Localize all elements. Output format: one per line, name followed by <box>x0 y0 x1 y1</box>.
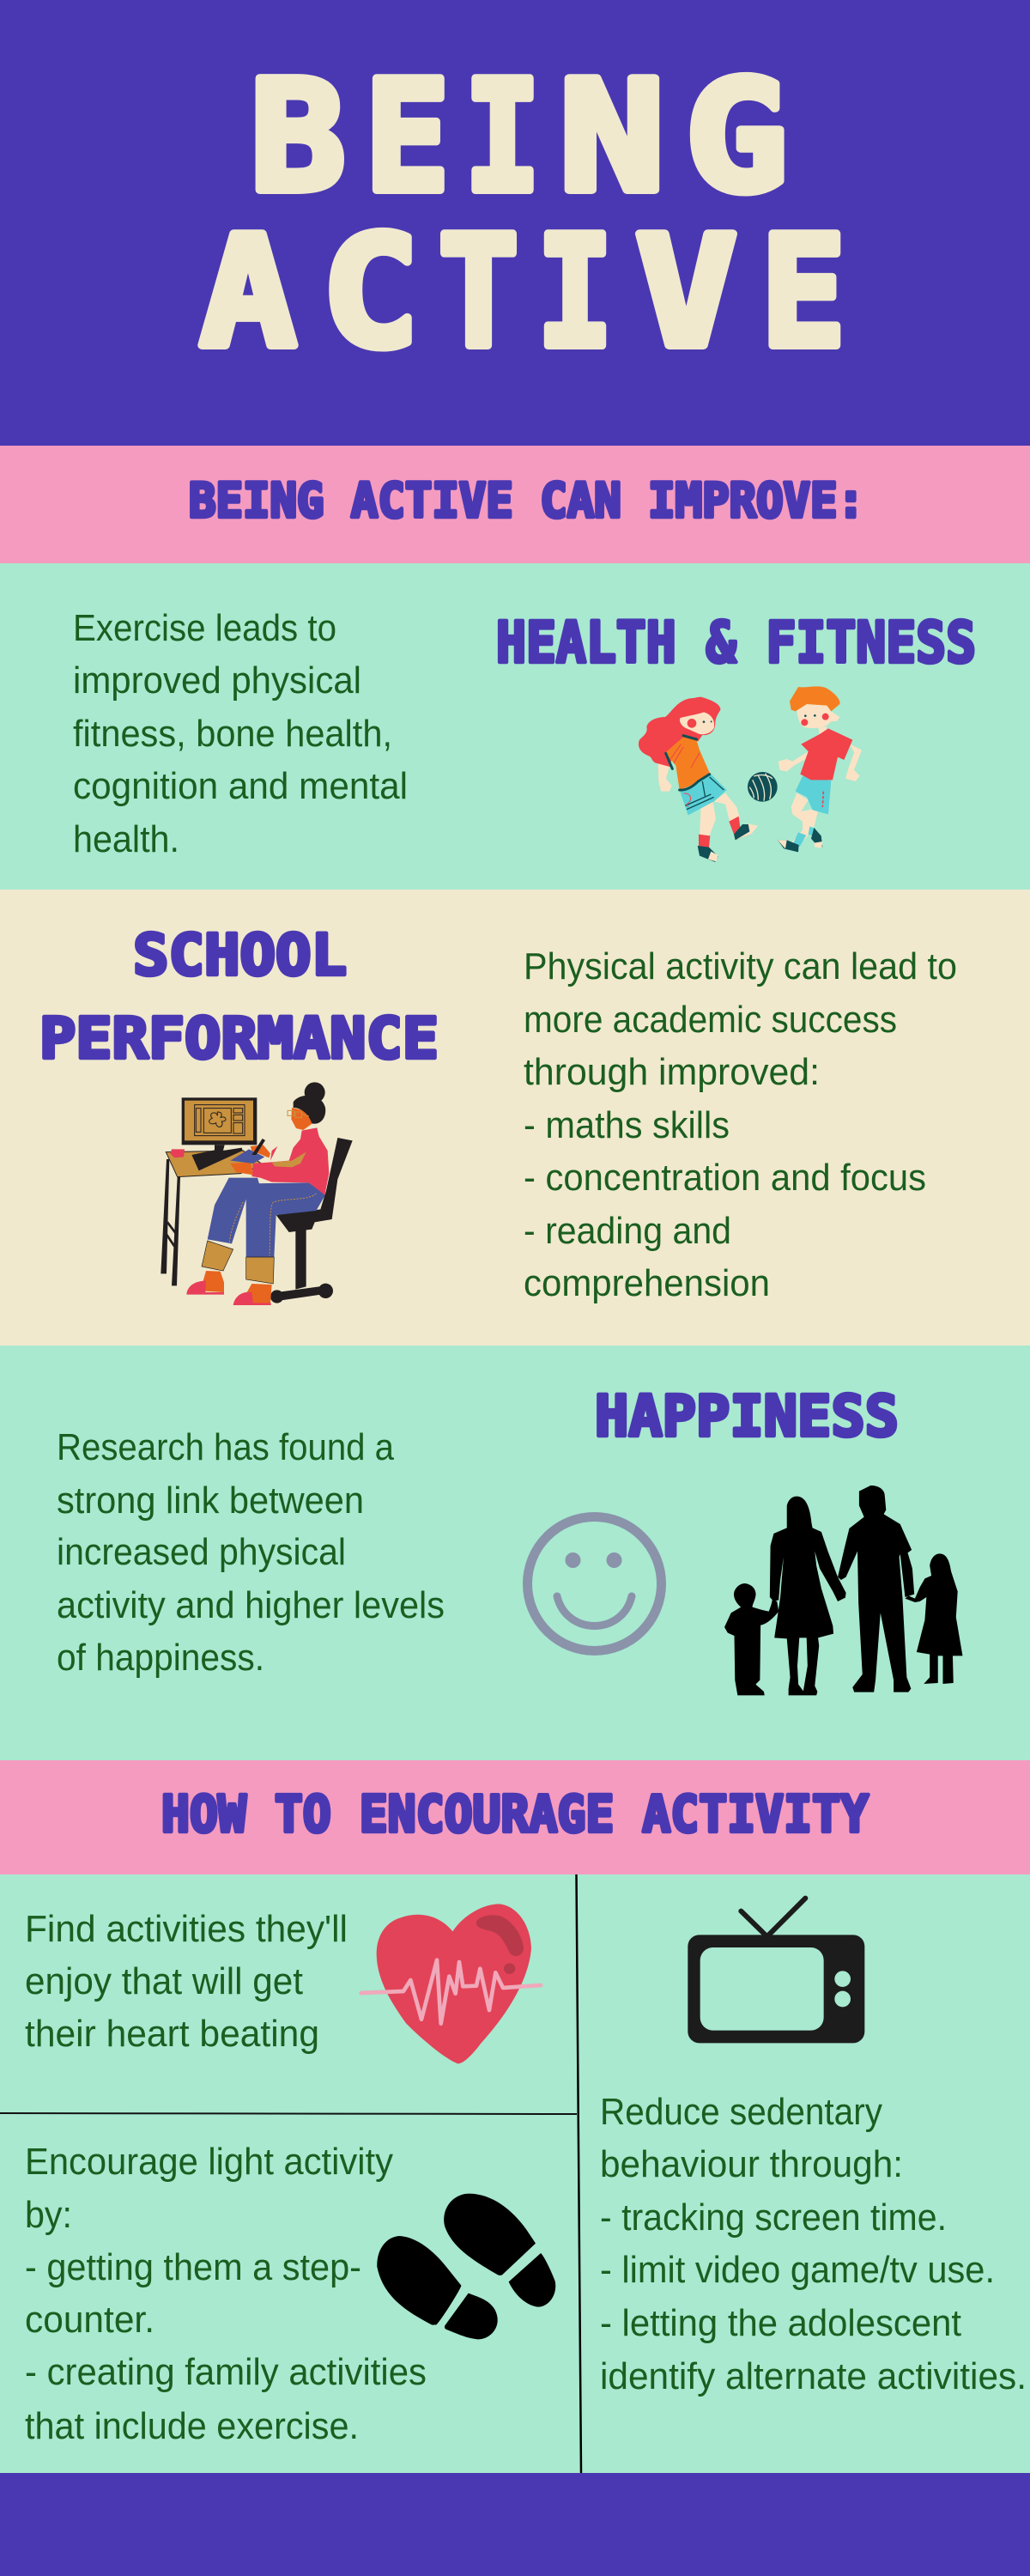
text block: school performance: Physical activity can lead to <box>524 945 957 987</box>
text block: happiness: strong link between <box>57 1479 364 1522</box>
panel: title banner <box>0 0 1030 446</box>
text block: health and fitness <box>73 607 408 860</box>
title: E <box>365 48 450 226</box>
text block: happiness: increased physical <box>57 1531 346 1573</box>
text block: school performance: - maths skills <box>524 1104 730 1146</box>
text block: light activity <box>25 2141 427 2447</box>
title: G <box>685 48 788 226</box>
text block: light activity: - getting them a step- <box>25 2246 361 2288</box>
text block: school performance: more academic success <box>524 999 897 1041</box>
panel: health and fitness <box>0 563 1030 890</box>
text block: reduce sedentary behaviour: - tracking screen time. <box>600 2196 947 2239</box>
title: I <box>464 48 541 226</box>
text block: health and fitness: cognition and mental <box>73 765 408 807</box>
text block: light activity: counter. <box>25 2299 154 2341</box>
text block: find activities: their heart beating <box>25 2013 319 2055</box>
text block: reduce sedentary behaviour: behaviour through: <box>600 2143 903 2185</box>
title: E <box>760 204 846 381</box>
text block: reduce sedentary behaviour: Reduce sedentary <box>600 2091 882 2133</box>
title: I <box>537 204 613 381</box>
title: N <box>560 48 664 226</box>
text block: find activities <box>25 1908 348 2055</box>
icon: smiley face <box>527 1516 661 1650</box>
heading: how to encourage activity: HOW TO ENCOURAGE ACTIVITY <box>161 1784 869 1844</box>
person <box>186 1082 329 1305</box>
text block: light activity: that include exercise. <box>25 2405 359 2447</box>
text block: school performance: comprehension <box>524 1262 770 1304</box>
title: V <box>635 204 737 381</box>
title <box>199 48 846 381</box>
panel: encouragement tips <box>0 1874 1030 2473</box>
icon: television <box>688 1899 864 2043</box>
mother silhouette <box>770 1497 846 1695</box>
text block: health and fitness: Exercise leads to <box>73 607 336 649</box>
text block: health and fitness: health. <box>73 818 179 860</box>
illustration: person working at computer <box>161 1082 353 1305</box>
text block: light activity: Encourage light activity <box>25 2141 393 2183</box>
panel: being active can improve banner <box>0 446 1030 563</box>
icon: footprints <box>377 2194 555 2339</box>
boy silhouette <box>724 1583 779 1695</box>
title: C <box>321 204 419 381</box>
text block: school performance: through improved: <box>524 1051 820 1093</box>
text block: find activities: Find activities they'll <box>25 1908 348 1950</box>
text block: light activity: by: <box>25 2194 72 2236</box>
father silhouette <box>838 1485 914 1692</box>
text block: find activities: enjoy that will get <box>25 1960 303 2002</box>
chair <box>270 1138 353 1303</box>
text block: health and fitness: improved physical <box>73 659 361 702</box>
panel: school performance <box>0 890 1030 1346</box>
heading: being active can improve: BEING ACTIVE CAN IMPROVE: <box>189 473 864 528</box>
heading: health and fitness: HEALTH & FITNESS <box>496 610 976 676</box>
title: T <box>438 204 518 381</box>
text block: school performance: - reading and <box>524 1210 731 1252</box>
illustration: family silhouette <box>724 1485 962 1695</box>
panel: happiness <box>0 1346 1030 1760</box>
heading: school performance: PERFORMANCE <box>39 1005 439 1072</box>
boy figure <box>778 686 862 852</box>
text block: reduce sedentary behaviour: - limit video game/tv use. <box>600 2249 995 2291</box>
girl silhouette <box>905 1553 962 1684</box>
text block: happiness <box>57 1426 445 1679</box>
footer band <box>0 2473 1030 2576</box>
text block: health and fitness: fitness, bone health, <box>73 713 392 755</box>
illustration: children playing football <box>639 686 862 862</box>
text block: happiness: of happiness. <box>57 1637 264 1679</box>
text block: reduce sedentary behaviour: - letting the adolescent <box>600 2302 961 2344</box>
text block: school performance <box>524 945 957 1304</box>
text block: reduce sedentary behaviour: identify alternate activities. <box>600 2355 1027 2397</box>
text block: school performance: - concentration and focus <box>524 1157 926 1199</box>
heading: happiness: HAPPINESS <box>595 1383 899 1449</box>
girl figure <box>639 697 758 862</box>
panel: how to encourage activity banner <box>0 1760 1030 1874</box>
title: B <box>251 48 345 226</box>
title: A <box>199 204 297 381</box>
desk <box>161 1149 264 1285</box>
text block: happiness: activity and higher levels <box>57 1584 445 1626</box>
football <box>748 772 778 802</box>
text block: reduce sedentary behaviour <box>600 2091 1027 2397</box>
heading: school performance: SCHOOL <box>133 922 347 988</box>
text block: happiness: Research has found a <box>57 1426 394 1468</box>
text block: light activity: - creating family activities <box>25 2351 427 2393</box>
heading: school performance <box>39 922 439 1072</box>
computer monitor <box>182 1097 257 1170</box>
icon: heart with heartbeat line <box>361 1904 541 2063</box>
